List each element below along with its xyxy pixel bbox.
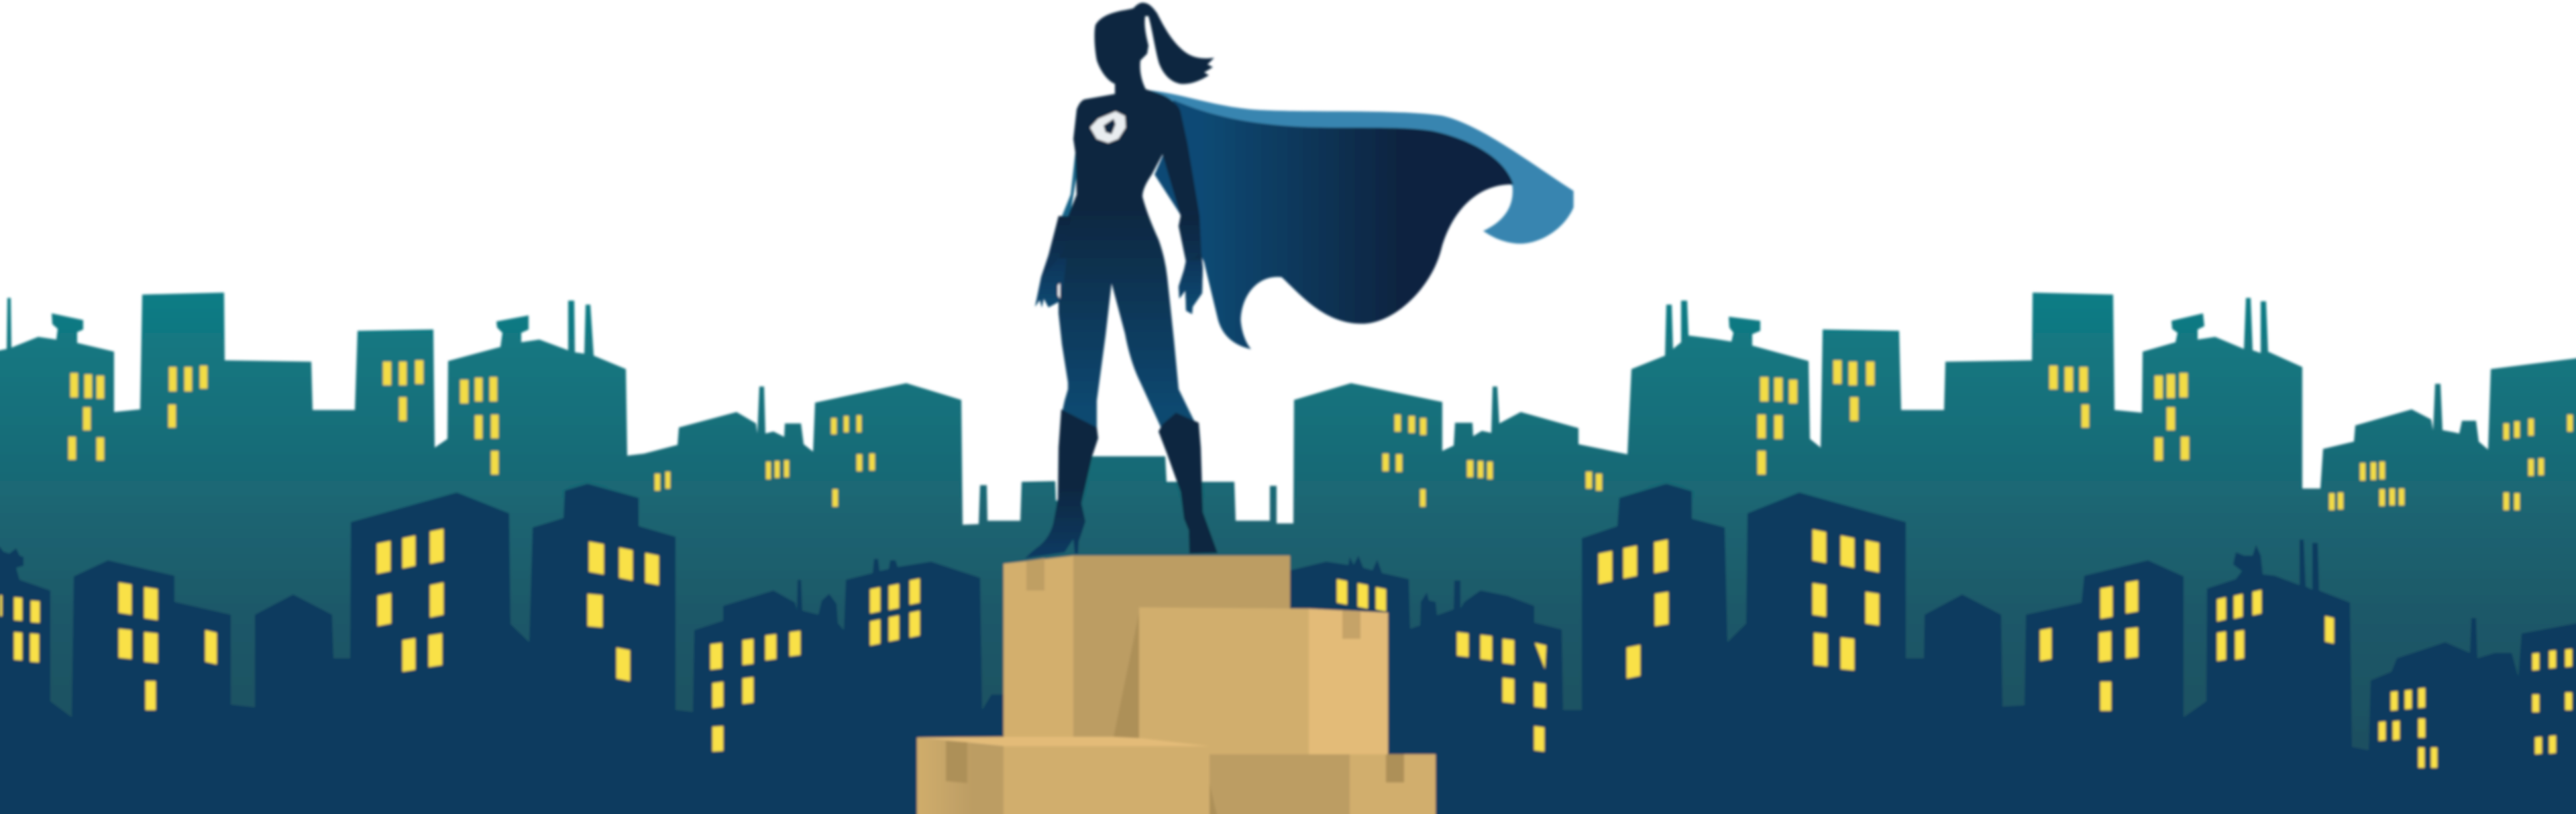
right boot (1159, 413, 1218, 554)
box: bottom right (1210, 754, 1436, 814)
left gauntlet (1041, 216, 1071, 277)
superhero figure with cape (1025, 3, 1574, 558)
right gauntlet (1179, 215, 1201, 262)
right hand (1179, 260, 1203, 314)
back skyline: teal buildings (0, 293, 2576, 814)
left arm highlight sliver (1062, 152, 1080, 216)
box: middle right (1139, 607, 1388, 758)
left hand (1035, 258, 1067, 307)
body silhouette with ponytail (1035, 3, 1214, 429)
cape: light blue lining (1148, 90, 1574, 244)
back skyline windows: lit yellow (68, 360, 2573, 510)
gap between left hand and thigh (1058, 283, 1060, 299)
cape: dark blue gradient (1155, 100, 1513, 349)
box: top back (1004, 556, 1290, 745)
stack of cardboard boxes (917, 556, 1436, 814)
front skyline windows: lit yellow (0, 529, 2572, 768)
front skyline: navy buildings (0, 484, 2576, 814)
box: bottom left (917, 737, 1210, 814)
left boot (1025, 409, 1098, 558)
chest emblem (1090, 111, 1126, 143)
